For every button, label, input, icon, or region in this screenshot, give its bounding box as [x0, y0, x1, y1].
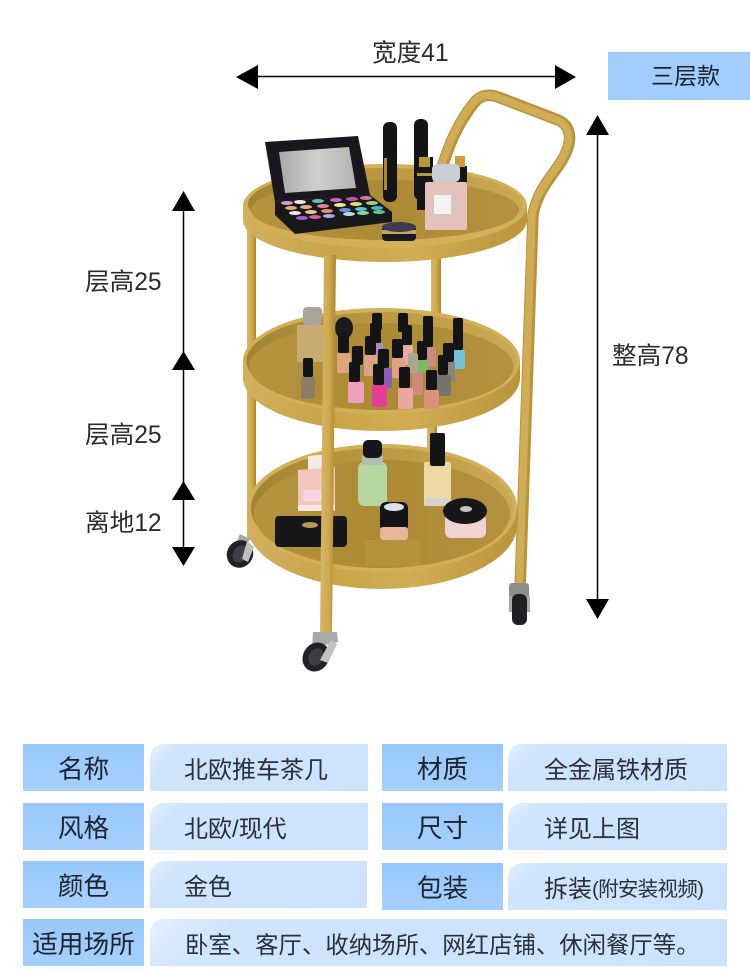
spec: style: 风格 — [58, 815, 109, 843]
handle and right leg — [441, 95, 570, 590]
front leg — [320, 255, 336, 634]
top tray — [243, 119, 527, 262]
perfume bottles — [417, 156, 467, 230]
spec value: material — [508, 744, 727, 791]
caster: right — [509, 583, 530, 625]
caster: left — [222, 534, 258, 573]
spec value: packaging: 拆装 — [544, 876, 592, 903]
spec: material: 材质 — [417, 756, 468, 784]
spec value: size — [508, 803, 727, 850]
spec: suitable places: 适用场所 — [32, 931, 135, 959]
middle tray — [243, 307, 520, 431]
spec: size: 尺寸 — [417, 815, 468, 843]
spec value: colour — [150, 861, 367, 908]
spec: material — [382, 744, 503, 791]
spec value: packaging — [508, 863, 727, 910]
spec: colour: 颜色 — [58, 873, 109, 901]
spec: style — [23, 803, 144, 850]
spec value: style — [150, 803, 368, 850]
eyeshadow palette — [265, 136, 392, 234]
spec value: packaging: (附安装视频) — [592, 878, 703, 900]
product photo: three-tier gold cart — [172, 65, 609, 672]
spec: packaging: 包装 — [417, 875, 468, 903]
tag: three-tier — [608, 52, 750, 100]
spec: packaging — [382, 863, 503, 910]
caster: front — [297, 632, 338, 676]
spec value: name — [150, 744, 368, 791]
spec: size — [382, 803, 503, 850]
label: width: 宽度41 — [372, 40, 449, 67]
spec: name: 名称 — [58, 756, 109, 784]
width arrow — [236, 65, 576, 89]
tier height arrows — [172, 191, 195, 566]
label: total height: 整高78 — [612, 343, 689, 370]
nail polish bottles — [297, 307, 465, 409]
spec value: colour: 金色 — [184, 874, 232, 901]
compact jar — [382, 222, 416, 241]
tag: three-tier: 三层款 — [651, 63, 720, 89]
bottom tray — [247, 433, 517, 589]
spec value: size: 详见上图 — [544, 816, 640, 843]
label: tier height 1: 层高25 — [85, 269, 162, 296]
mascara tubes — [383, 119, 428, 202]
height arrow — [586, 115, 609, 619]
spec value: suitable places: 卧室、客厅、收纳场所、网红店铺、休闲餐厅等。 — [185, 932, 700, 958]
spec: colour — [23, 861, 144, 908]
label: tier height 2: 层高25 — [85, 422, 162, 449]
back legs — [247, 230, 441, 540]
bottom tray items — [275, 433, 487, 547]
spec value: material: 全金属铁材质 — [544, 757, 688, 784]
spec value: style: 北欧/现代 — [184, 816, 287, 843]
label: ground clearance: 离地12 — [85, 510, 162, 537]
spec: name — [23, 744, 144, 791]
spec value: name: 北欧推车茶几 — [184, 757, 328, 784]
spec: suitable places — [23, 919, 144, 966]
spec value: suitable places — [150, 919, 727, 966]
